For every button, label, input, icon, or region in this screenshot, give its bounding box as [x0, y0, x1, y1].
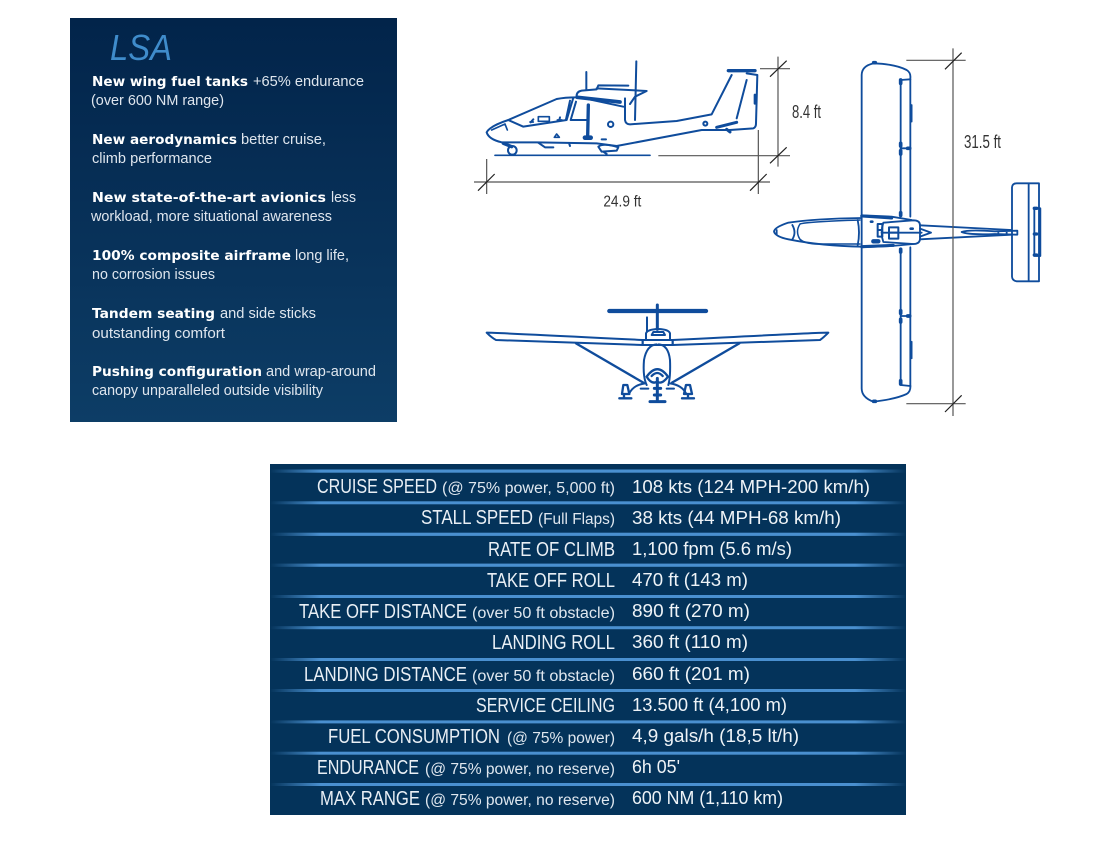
row: take off roll: TAKE OFF ROLL — [487, 570, 615, 592]
row: landing roll — [492, 631, 748, 654]
row: service ceiling — [476, 694, 787, 717]
row: landing distance — [304, 663, 750, 686]
row: fuel consumption: (@ 75% power) — [507, 730, 615, 747]
row: landing distance: LANDING DISTANCE — [304, 664, 467, 686]
row: take off distance: 890 ft (270 m) — [632, 600, 750, 621]
row: landing distance: (over 50 ft obstacle) — [472, 668, 615, 685]
feature: avionics — [90, 190, 356, 225]
row: stall speed: STALL SPEED — [421, 507, 533, 529]
row: stall speed — [421, 507, 841, 529]
row: endurance: (@ 75% power, no reserve) — [425, 761, 615, 778]
diagram: top view with dimensions — [774, 48, 1040, 416]
feature: avionics: New state-of-the-art avionics — [92, 191, 326, 206]
row: service ceiling: SERVICE CEILING — [476, 695, 615, 717]
tail boom — [920, 225, 1012, 239]
feature: wing fuel tanks: +65% endurance — [253, 74, 364, 90]
fuselage — [774, 218, 862, 247]
feature: aerodynamics: New aerodynamics — [92, 133, 237, 148]
feature: tandem seating — [92, 306, 316, 342]
feature: aerodynamics: better cruise, — [241, 132, 326, 148]
feature: composite airframe: no corrosion issues — [92, 267, 215, 283]
row: fuel consumption — [328, 725, 799, 748]
feature: pushing configuration: canopy unparalleled outside visibility — [92, 383, 324, 399]
panel: LSA features — [70, 18, 397, 422]
row: cruise speed: CRUISE SPEED — [317, 476, 437, 498]
feature: avionics: workload, more situational awareness — [90, 209, 332, 225]
aircraft planform — [774, 63, 1040, 402]
fuselage — [646, 329, 670, 340]
feature: wing fuel tanks — [91, 74, 364, 109]
wings — [487, 333, 643, 345]
panel: specifications table — [270, 464, 906, 815]
dimension: height: 8.4 ft — [792, 102, 821, 122]
feature: pushing configuration — [92, 364, 376, 399]
row: max range — [320, 787, 783, 810]
row: landing roll: LANDING ROLL — [492, 632, 615, 654]
feature: aerodynamics — [92, 132, 326, 167]
dimension: wingspan: 31.5 ft — [964, 132, 1001, 152]
row: take off roll — [487, 569, 748, 592]
feature: pushing configuration: and wrap-around — [266, 364, 376, 380]
feature: tandem seating: outstanding comfort — [92, 326, 225, 342]
row: landing distance: 660 ft (201 m) — [632, 663, 750, 684]
wing — [862, 63, 910, 217]
feature: composite airframe — [92, 248, 349, 283]
row: rate of climb: 1,100 fpm (5.6 m/s) — [632, 538, 792, 559]
row: take off distance: TAKE OFF DISTANCE — [299, 601, 467, 623]
row: stall speed: 38 kts (44 MPH-68 km/h) — [632, 507, 841, 528]
feature: composite airframe: 100% composite airframe — [92, 249, 291, 264]
propeller — [609, 304, 706, 317]
row: service ceiling: 13.500 ft (4,100 m) — [632, 694, 787, 715]
feature: composite airframe: long life, — [295, 248, 349, 264]
dimension lines — [474, 57, 790, 194]
row: cruise speed: (@ 75% power, 5,000 ft) — [442, 480, 615, 497]
feature: tandem seating: Tandem seating — [92, 307, 215, 322]
row: cruise speed: 108 kts (124 MPH-200 km/h) — [632, 476, 870, 497]
diagram: front view — [487, 305, 828, 402]
aircraft side profile — [487, 61, 757, 155]
diagram: side view with dimensions — [474, 57, 790, 211]
row: endurance — [317, 756, 680, 779]
landing gear — [650, 378, 665, 402]
row: max range: (@ 75% power, no reserve) — [425, 792, 615, 809]
dimension lines — [906, 48, 966, 416]
row: endurance: 6h 05' — [632, 756, 680, 777]
feature: pushing configuration: Pushing configuration — [92, 365, 262, 380]
row: cruise speed — [317, 476, 870, 498]
row: fuel consumption: FUEL CONSUMPTION — [328, 726, 500, 748]
row: max range: 600 NM (1,110 km) — [632, 787, 783, 808]
dimension: length: 24.9 ft — [603, 194, 642, 211]
row: take off distance: (over 50 ft obstacle) — [472, 605, 615, 622]
feature: aerodynamics: climb performance — [92, 151, 212, 167]
feature: tandem seating: and side sticks — [220, 306, 316, 322]
row: take off roll: 470 ft (143 m) — [632, 569, 748, 590]
row: fuel consumption: 4,9 gals/h (18,5 lt/h) — [632, 725, 799, 746]
row: landing roll: 360 ft (110 m) — [632, 631, 748, 652]
row: rate of climb: RATE OF CLIMB — [488, 539, 615, 561]
row: max range: MAX RANGE — [320, 788, 420, 810]
row separators — [270, 470, 906, 786]
feature: avionics: less — [331, 190, 356, 206]
row: take off distance — [299, 600, 750, 623]
row: endurance: ENDURANCE — [317, 757, 419, 779]
row: rate of climb — [488, 538, 792, 561]
struts — [576, 343, 739, 383]
tail — [1012, 183, 1039, 281]
row: stall speed: (Full Flaps) — [538, 511, 615, 528]
feature: wing fuel tanks: New wing fuel tanks — [92, 75, 248, 90]
heading: LSA: LSA — [110, 27, 172, 68]
feature: wing fuel tanks: (over 600 NM range) — [91, 93, 224, 109]
